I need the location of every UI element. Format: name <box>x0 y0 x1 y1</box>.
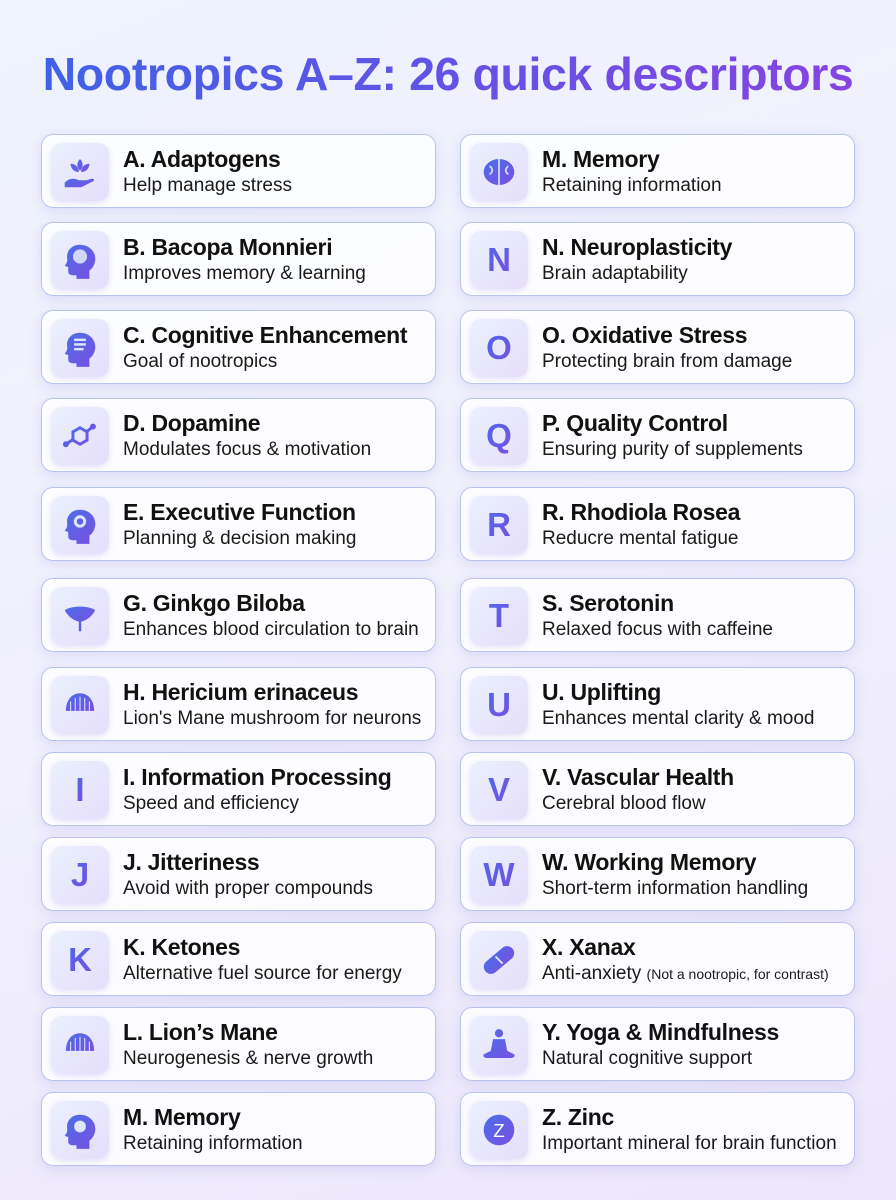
card: O: Protecting brain from damage <box>542 351 792 372</box>
card: Z: Z <box>493 1120 505 1141</box>
card: B: B. Bacopa Monnieri <box>123 234 332 260</box>
card: X: Anti-anxiety (Not a nootropic, for contrast) <box>542 963 829 984</box>
card: H: Lion's Mane mushroom for neurons <box>123 708 421 729</box>
card: P: Q <box>486 417 512 454</box>
card: U: Enhances mental clarity & mood <box>542 708 814 729</box>
card: O: O <box>486 329 512 366</box>
card: N: N. Neuroplasticity <box>542 234 732 260</box>
card: Z: Z. Zinc <box>542 1104 614 1130</box>
card: C: Goal of nootropics <box>123 351 277 372</box>
card: V: V <box>488 771 510 808</box>
card: D: Modulates focus & motivation <box>123 439 371 460</box>
card: H <box>41 667 436 741</box>
card: V <box>460 752 855 826</box>
card: X <box>460 922 855 996</box>
card: N: N <box>487 241 511 278</box>
card: W <box>460 837 855 911</box>
card: B: Improves memory & learning <box>123 263 366 284</box>
card: X: X. Xanax <box>542 934 636 960</box>
card: K: K. Ketones <box>123 934 240 960</box>
card: V: V. Vascular Health <box>542 764 734 790</box>
card: H: H. Hericium erinaceus <box>123 679 358 705</box>
card: J: J <box>71 856 89 893</box>
card: W: Short-term information handling <box>542 878 808 899</box>
card: Z <box>460 1092 855 1166</box>
card: G <box>41 578 436 652</box>
card: R: Reducre mental fatigue <box>542 528 738 549</box>
card: J <box>41 837 436 911</box>
card: P: Ensuring purity of supplements <box>542 439 803 460</box>
card: Y <box>460 1007 855 1081</box>
card: P <box>460 398 855 472</box>
card: R: R <box>487 506 511 543</box>
card: R: R. Rhodiola Rosea <box>542 499 740 525</box>
card: I: Speed and efficiency <box>123 793 299 814</box>
card: R <box>460 487 855 561</box>
card: N: Brain adaptability <box>542 263 688 284</box>
card: I: I <box>75 771 85 808</box>
card: A <box>41 134 436 208</box>
card: W: W. Working Memory <box>542 849 756 875</box>
card: G: Enhances blood circulation to brain <box>123 619 419 640</box>
card: E: E. Executive Function <box>123 499 356 525</box>
card: M left: Retaining information <box>123 1133 303 1154</box>
card: J: Avoid with proper compounds <box>123 878 373 899</box>
card: D: D. Dopamine <box>123 410 260 436</box>
card: K: Alternative fuel source for energy <box>123 963 402 984</box>
card: J: J. Jitteriness <box>123 849 259 875</box>
card: Y: Natural cognitive support <box>542 1048 752 1069</box>
card: S: Relaxed focus with caffeine <box>542 619 773 640</box>
card: E: Planning & decision making <box>123 528 356 549</box>
card: S: S. Serotonin <box>542 590 674 616</box>
card: O <box>460 310 855 384</box>
card: M right: Retaining information <box>542 175 722 196</box>
card: A: A. Adaptogens <box>123 146 281 172</box>
card: I: I. Information Processing <box>123 764 392 790</box>
card: O: O. Oxidative Stress <box>542 322 747 348</box>
card: Z: Important mineral for brain function <box>542 1133 837 1154</box>
card: N <box>460 222 855 296</box>
card: K <box>41 922 436 996</box>
card: L: Neurogenesis & nerve growth <box>123 1048 373 1069</box>
card: L <box>41 1007 436 1081</box>
card: S: T <box>489 597 509 634</box>
card: Y: Y. Yoga & Mindfulness <box>542 1019 779 1045</box>
card: B <box>41 222 436 296</box>
card: P: P. Quality Control <box>542 410 728 436</box>
card: I <box>41 752 436 826</box>
card: M right: M. Memory <box>542 146 659 172</box>
card: U: U <box>487 686 511 723</box>
card: A: Help manage stress <box>123 175 292 196</box>
card: C <box>41 310 436 384</box>
card: M right <box>460 134 855 208</box>
card: W: W <box>483 856 515 893</box>
card: L: L. Lion’s Mane <box>123 1019 278 1045</box>
card: V: Cerebral blood flow <box>542 793 706 814</box>
card: K: K <box>68 941 92 978</box>
card: C: C. Cognitive Enhancement <box>123 322 407 348</box>
card: E <box>41 487 436 561</box>
card: G: G. Ginkgo Biloba <box>123 590 305 616</box>
card: M left <box>41 1092 436 1166</box>
card: D <box>41 398 436 472</box>
card: U: U. Uplifting <box>542 679 661 705</box>
title: Nootropics A–Z: 26 quick descriptors <box>43 48 853 100</box>
card: S <box>460 578 855 652</box>
card: U <box>460 667 855 741</box>
card: M left: M. Memory <box>123 1104 240 1130</box>
